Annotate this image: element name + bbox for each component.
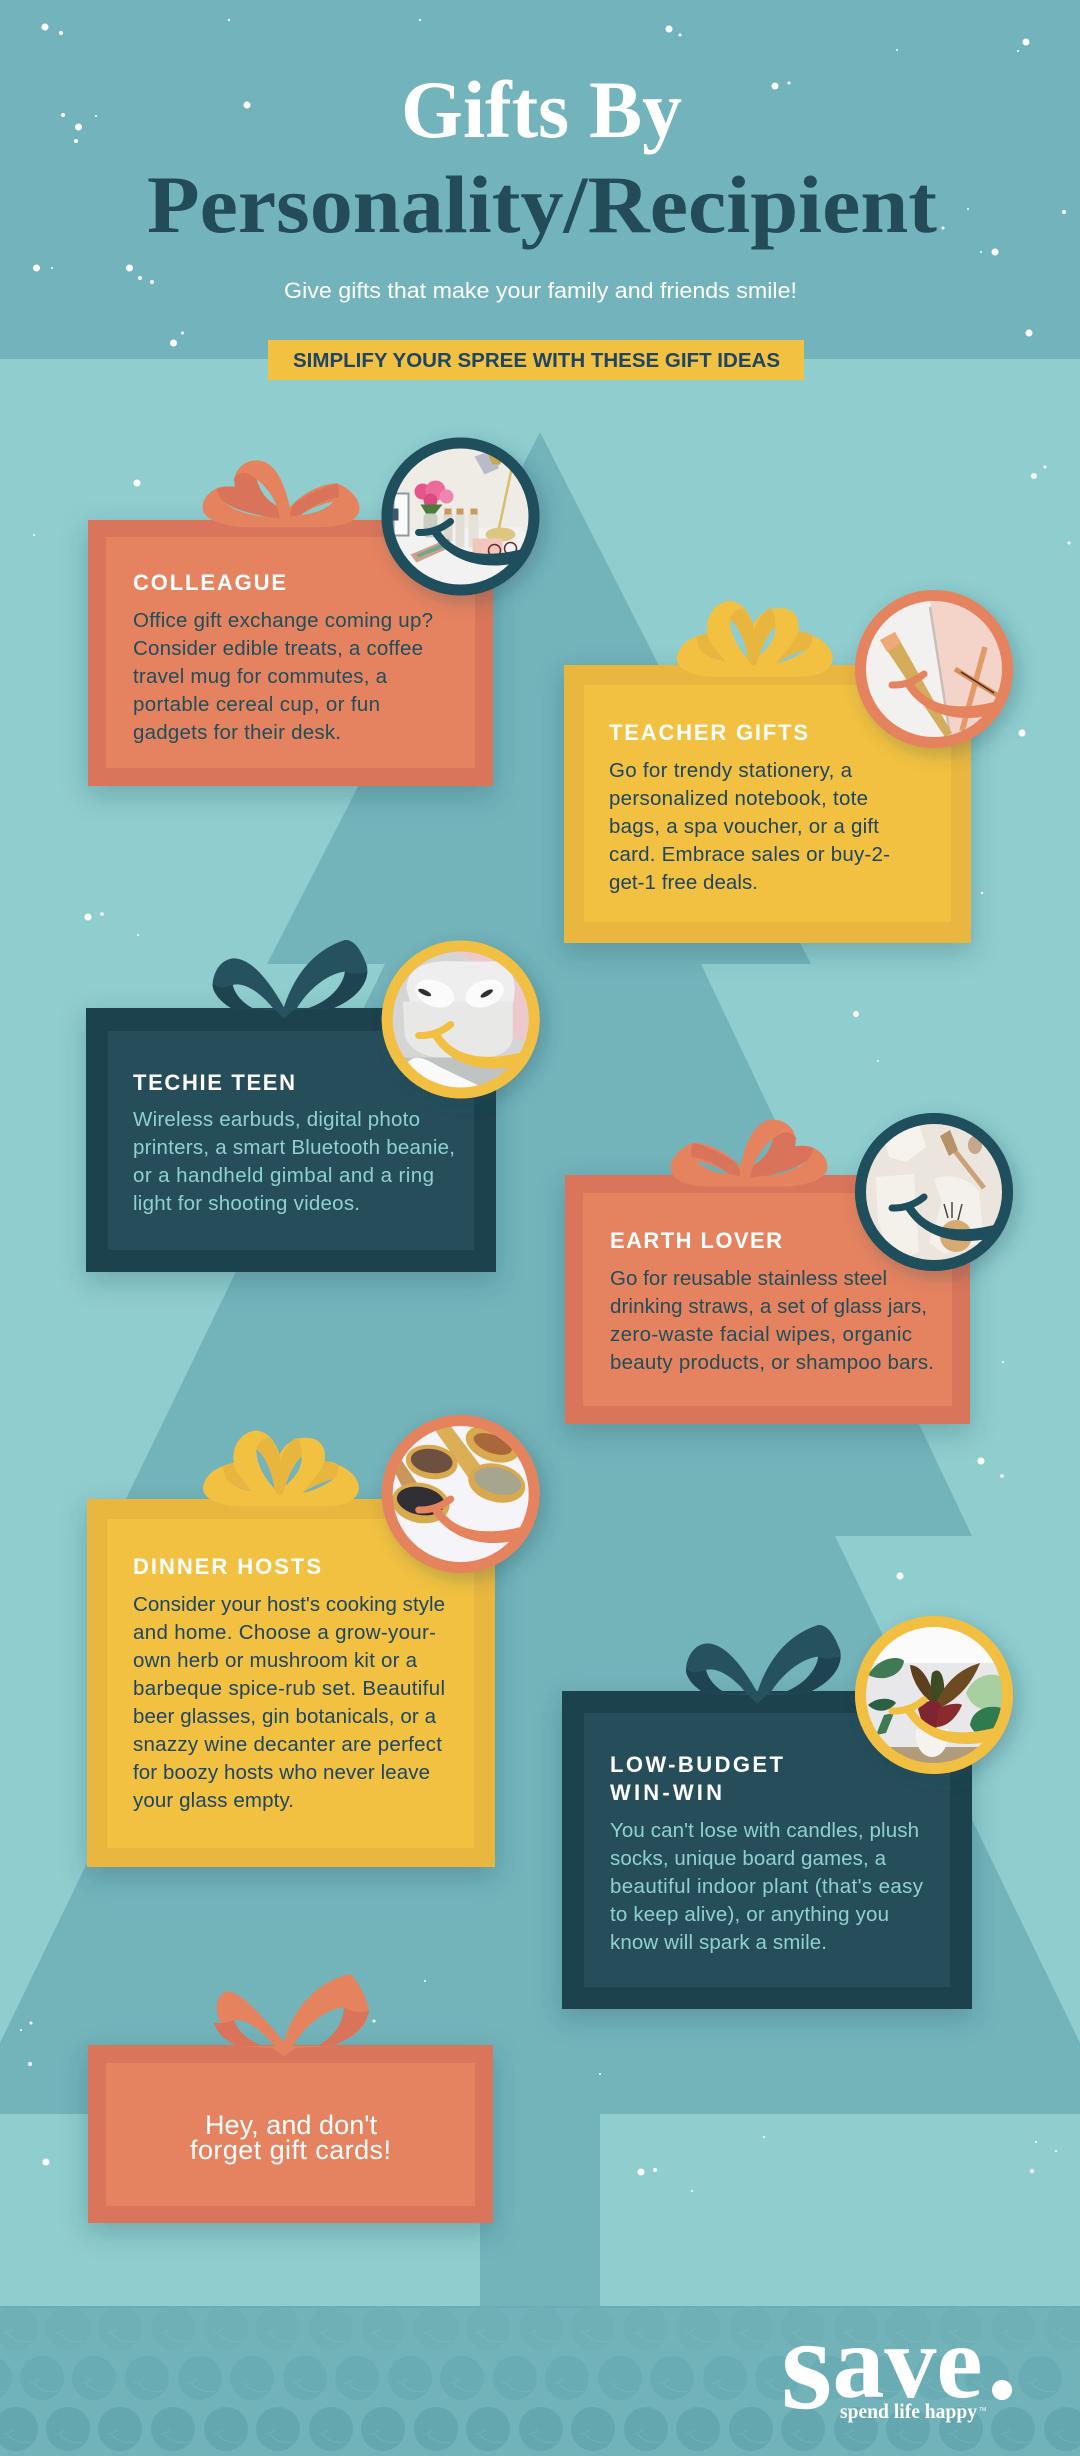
body text (610, 1819, 924, 1954)
heading: EARTH LOVER (610, 1228, 782, 1253)
heading: WIN-WIN (610, 1780, 722, 1805)
heading (610, 1752, 784, 1805)
gift box (87, 1499, 495, 1867)
body text: zero-waste facial wipes, organic (610, 1323, 912, 1346)
body text: travel mug for commutes, a (133, 665, 388, 688)
smile (892, 1700, 994, 1744)
body text: own herb or mushroom kit or a (133, 1649, 418, 1672)
message: forget gift cards! (190, 2135, 391, 2165)
body text: barbeque spice-rub set. Beautiful (133, 1677, 445, 1700)
body text: Go for reusable stainless steel (610, 1267, 887, 1290)
bow (214, 1974, 369, 2056)
heading: TECHIE TEEN (133, 1070, 295, 1095)
body text (133, 1593, 445, 1812)
body text: beauty products, or shampoo bars. (610, 1351, 934, 1374)
body text: You can't lose with candles, plush (610, 1819, 919, 1842)
body text (133, 1108, 455, 1215)
christmas tree silhouette (0, 432, 1080, 2306)
body text: for boozy hosts who never leave (133, 1761, 430, 1784)
body text: printers, a smart Bluetooth beanie, (133, 1136, 455, 1159)
header band (0, 0, 1080, 359)
footer band (0, 2306, 1080, 2456)
banner (268, 340, 804, 380)
logo: save spend life happy: TM (979, 2407, 986, 2413)
heading: DINNER HOSTS (133, 1554, 321, 1579)
tree trunk surround right (600, 2114, 1080, 2306)
smile pattern row 1 (0, 2306, 1080, 2350)
body text: Consider edible treats, a coffee (133, 637, 423, 660)
icon: desk photo with smile ring (382, 438, 540, 596)
panel: dinner hosts (87, 1415, 540, 1867)
icon: stationery photo with smile ring (855, 590, 1013, 748)
logo: save spend life happy: s (781, 2290, 832, 2437)
logo: save spend life happy: ave (832, 2305, 983, 2420)
body text: socks, unique board games, a (610, 1847, 887, 1870)
heading: COLLEAGUE (133, 570, 286, 595)
logo: save spend life happy: spend life happy (840, 2399, 977, 2423)
body text: get-1 free deals. (609, 871, 758, 894)
gift box (564, 665, 971, 943)
title line 2: Personality/Recipient (147, 159, 937, 250)
smile (419, 1499, 521, 1543)
gift box (88, 520, 493, 786)
gift box (86, 1008, 496, 1272)
panel: low-budget win-win (562, 1616, 1013, 2009)
title (147, 64, 937, 250)
banner: SIMPLIFY YOUR SPREE WITH THESE GIFT IDEAS (293, 349, 780, 372)
body text: know will spark a smile. (610, 1931, 827, 1954)
gift box (565, 1175, 970, 1424)
body text: Office gift exchange coming up? (133, 609, 433, 632)
body text (609, 759, 890, 894)
panel: teacher gifts (564, 590, 1013, 943)
smile (418, 522, 520, 566)
body text (133, 609, 433, 744)
body text: personalized notebook, tote (609, 787, 868, 810)
message (190, 2110, 391, 2165)
logo: save spend life happy (781, 2290, 1012, 2437)
heading: TEACHER GIFTS (609, 720, 808, 745)
panel: techie teen (86, 940, 540, 1272)
body text: card. Embrace sales or buy-2- (609, 843, 890, 866)
body text: or a handheld gimbal and a ring (133, 1164, 434, 1187)
message: Hey, and don't (205, 2110, 377, 2140)
body text: bags, a spa voucher, or a gift (609, 815, 879, 838)
bow (677, 601, 833, 677)
bow (203, 1431, 359, 1506)
panel: gift cards reminder (88, 1974, 493, 2223)
heading: LOW-BUDGET (610, 1752, 784, 1777)
body text: gadgets for their desk. (133, 721, 341, 744)
gift box (562, 1691, 972, 2009)
smile pattern row 2 (0, 2356, 1062, 2400)
bow (671, 1120, 827, 1187)
smile (892, 1197, 994, 1241)
icon: earbuds photo with smile ring (382, 940, 540, 1098)
icon: zero-waste photo with smile ring (855, 1113, 1013, 1271)
title line 1: Gifts By (401, 64, 682, 155)
body text: snazzy wine decanter are perfect (133, 1733, 442, 1756)
gift box (88, 2045, 493, 2223)
body text: Go for trendy stationery, a (609, 759, 853, 782)
bow (203, 460, 359, 527)
icon: house plant photo with smile ring (855, 1616, 1013, 1774)
body text: Wireless earbuds, digital photo (133, 1108, 420, 1131)
body text (610, 1267, 934, 1374)
body text: and home. Choose a grow-your- (133, 1621, 436, 1644)
panel: colleague (88, 438, 540, 786)
tree trunk surround left (0, 2114, 480, 2306)
body text: to keep alive), or anything you (610, 1903, 889, 1926)
tagline: Give gifts that make your family and friends smile! (284, 278, 797, 303)
smile (892, 674, 994, 718)
bow (686, 1625, 841, 1704)
body text: beautiful indoor plant (that's easy (610, 1875, 924, 1898)
icon: spice spoons photo with smile ring (382, 1415, 540, 1573)
smile pattern row 3 (0, 2407, 1080, 2451)
smile (419, 1024, 521, 1069)
body text: drinking straws, a set of glass jars, (610, 1295, 927, 1318)
body text: Consider your host's cooking style (133, 1593, 445, 1616)
body text: light for shooting videos. (133, 1192, 360, 1215)
body text: portable cereal cup, or fun (133, 693, 380, 716)
body text: beer glasses, gin botanicals, or a (133, 1705, 437, 1728)
bow (213, 940, 367, 1019)
body text: your glass empty. (133, 1789, 294, 1812)
panel: earth lover (565, 1113, 1013, 1424)
